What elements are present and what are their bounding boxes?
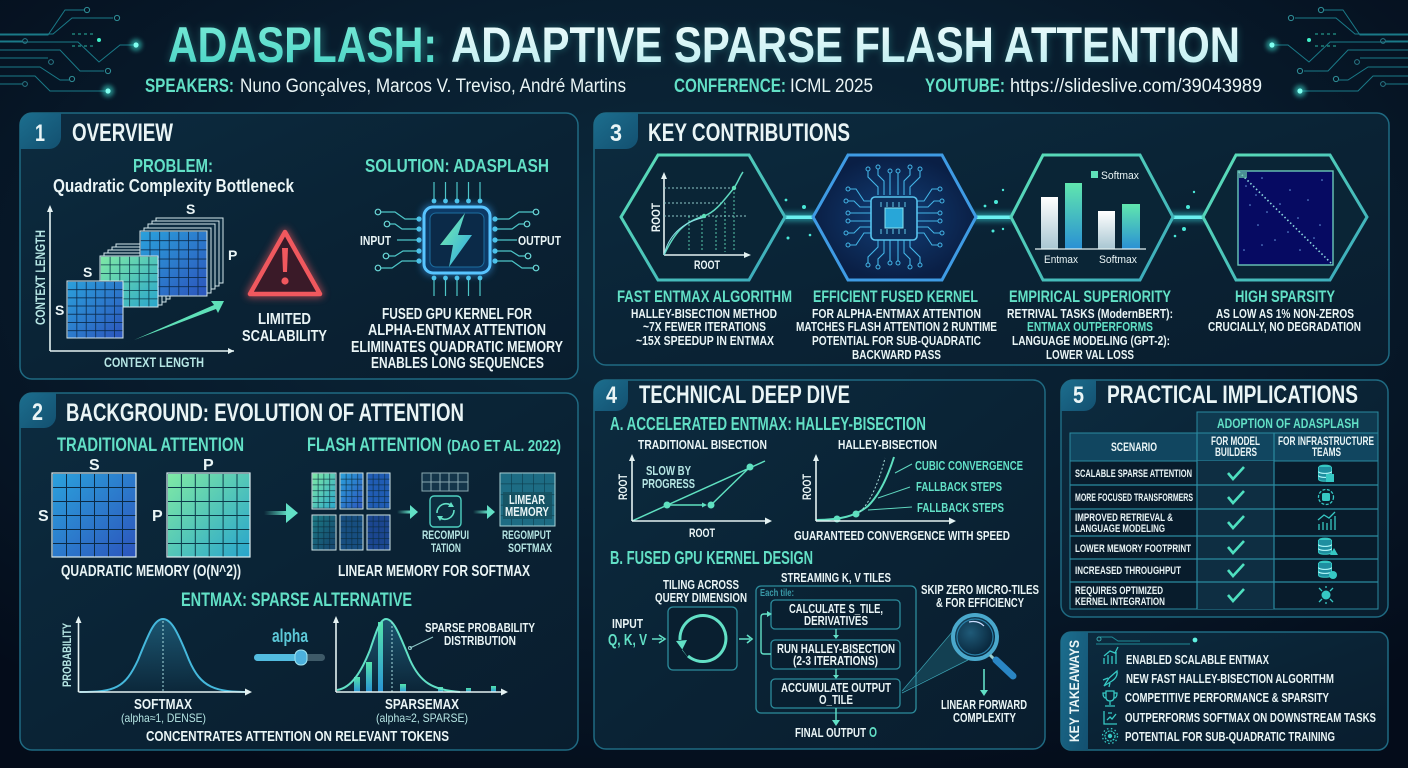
matrices: S by S and P by P: P [152,508,163,525]
final output: O [869,724,877,741]
solution description: ELIMINATES QUADRATIC MEMORY [351,339,563,356]
solution description: ENABLES LONG SEQUENCES [371,355,544,372]
memory captions: QUADRATIC MEMORY (O(N^2)) [61,563,241,580]
row: increased throughput: INCREASED THROUGHPUT [1075,565,1181,577]
contribution: efficient fused kernel [796,287,997,362]
limited scalability label: LIMITED [258,311,311,328]
tiling loop: QUERY DIMENSION [655,590,747,605]
chart: traditional bisection: ROOT [689,526,715,540]
circuit decoration: top right [1266,7,1408,97]
row: more focused transformers: MORE FOCUSED TRANSFORMERS [1075,492,1193,504]
step: calculate: CALCULATE S_TILE, [789,601,883,616]
chart: quadratic complexity matrices: S [186,201,195,217]
recomputation icon: TATION [431,541,461,555]
contribution: empirical superiority: LANGUAGE MODELING (GPT-2): [1012,333,1170,348]
recomputation icon: RECOMPUI [422,528,469,542]
hexagon: high sparsity heatmap [1203,155,1367,280]
row: scalable sparse attention [1075,465,1334,482]
step: calculate: DERIVATIVES [804,613,868,628]
problem heading: PROBLEM: [133,156,213,176]
row: lower memory footprint [1075,538,1338,555]
chart: softmax distribution: (alpha≈1, DENSE) [121,711,206,725]
contribution: fast entmax algorithm [617,287,792,348]
concentrates caption: CONCENTRATES ATTENTION ON RELEVANT TOKENS [146,728,449,745]
problem heading: Quadratic Complexity Bottleneck [53,176,295,196]
arrow to linear memory [473,505,495,519]
speakers / conference / youtube line: YOUTUBE: [925,76,1005,97]
row: more focused transformers [1075,490,1334,504]
icon: AdaSplash GPU chip [375,182,539,296]
chart: traditional bisection: PROGRESS [642,476,695,491]
contribution: efficient fused kernel: POTENTIAL FOR SUB-QUADRATIC [812,333,981,348]
contribution: fast entmax algorithm: ~7X FEWER ITERATIONS [643,319,766,334]
hexagon: empirical superiority bar chart: Entmax [1044,254,1078,266]
takeaway: potential for sub-quadratic training [1102,728,1335,744]
row: improved retrieval [1075,512,1335,535]
hexagon: empirical superiority bar chart: Softmax [1099,254,1137,266]
contribution: efficient fused kernel: BACKWARD PASS [852,347,941,362]
contribution: empirical superiority: LOWER VAL LOSS [1046,347,1134,362]
chart: traditional bisection [616,437,772,540]
section B heading: B. FUSED GPU KERNEL DESIGN [610,548,813,568]
vertical key takeaways label: KEY TAKEAWAYS [1066,640,1082,742]
chart: quadratic complexity matrices: CONTEXT LENGTH [104,354,204,370]
panel 1 heading: OVERVIEW [72,119,173,147]
traditional attention heading: TRADITIONAL ATTENTION [57,435,244,456]
memory captions: LINEAR MEMORY FOR SOFTMAX [338,563,530,580]
speakers / conference / youtube line [145,76,1262,97]
solution description: ALPHA-ENTMAX ATTENTION [368,322,546,339]
glowing connectors between hexagons [778,189,1209,240]
skip zero micro-tiles magnifier: SKIP ZERO MICRO-TILES [921,582,1039,597]
title: ADASPLASH: [168,17,437,73]
row: requires optimized kernel integration: REQUIRES OPTIMIZED [1075,585,1163,597]
speakers / conference / youtube line: https://slideslive.com/39043989 [1010,76,1262,97]
speakers / conference / youtube line: SPEAKERS: [145,76,234,97]
title: ADAPTIVE SPARSE FLASH ATTENTION [451,17,1240,73]
panel 3 number: 3 [610,120,622,147]
contribution: empirical superiority: EMPIRICAL SUPERIORITY [1009,287,1172,306]
matrices: S by S and P by P: S [38,508,49,525]
streaming tile pipeline: STREAMING K, V TILES [781,570,891,585]
skip zero micro-tiles magnifier [901,582,1039,693]
linear memory box [500,473,555,555]
panel 4: technical deep dive [594,380,1045,749]
skip zero micro-tiles magnifier: & FOR EFFICIENCY [936,595,1024,610]
hexagon: empirical superiority bar chart [1011,155,1173,280]
linear memory box: LIMEAR [509,492,545,507]
solution description [351,306,563,372]
adoption table: TEAMS [1312,445,1341,459]
panel 1 number: 1 [35,120,45,147]
panel 4 heading: TECHNICAL DEEP DIVE [639,381,850,409]
input Q K V: Q, K, V [608,632,647,649]
flash attention heading: (DAO ET AL. 2022) [447,438,561,455]
hexagon: empirical superiority bar chart: Softmax [1101,170,1139,182]
takeaway: competitive performance: COMPETITIVE PERFORMANCE & SPARSITY [1125,690,1329,705]
chip input and output labels: OUTPUT [518,233,561,248]
panel 3: key contributions [594,113,1389,365]
final output: FINAL OUTPUT [795,725,866,740]
panel 2 number: 2 [32,399,43,426]
takeaway: enabled scalable entmax: ENABLED SCALABLE ENTMAX [1126,652,1269,667]
guaranteed convergence caption: GUARANTEED CONVERGENCE WITH SPEED [794,528,1010,543]
takeaway: new fast halley-bisection: NEW FAST HALLEY-BISECTION ALGORITHM [1126,671,1334,686]
contribution: efficient fused kernel: FOR ALPHA-ENTMAX ATTENTION [812,306,981,321]
linear memory box: SOFTMAX [508,541,552,555]
entmax heading: ENTMAX: SPARSE ALTERNATIVE [181,590,412,611]
linear forward complexity [941,669,1027,725]
step: halley-bisection: RUN HALLEY-BISECTION [777,641,895,656]
chart: sparsemax distribution: SPARSE PROBABILITY [425,620,535,635]
linear forward complexity: LINEAR FORWARD [941,697,1027,712]
section A heading: A. ACCELERATED ENTMAX: HALLEY-BISECTION [610,414,926,434]
step: accumulate: O_TILE [819,692,853,707]
chart: sparsemax distribution: SPARSEMAX [385,696,459,713]
contribution: high sparsity [1208,287,1361,334]
contribution: high sparsity: HIGH SPARSITY [1235,287,1335,306]
contribution: fast entmax algorithm: HALLEY-BISECTION METHOD [631,306,777,321]
speakers / conference / youtube line: Nuno Gonçalves, Marcos V. Treviso, André Martins [240,76,626,97]
linear forward complexity: COMPLEXITY [953,710,1016,725]
adoption table: SCENARIO [1111,440,1157,454]
contribution: empirical superiority [1007,287,1173,362]
solution heading: SOLUTION: ADASPLASH [365,156,549,176]
small circuit decoration [1096,637,1197,644]
row: requires optimized kernel integration [1075,585,1333,608]
adoption table: BUILDERS [1215,445,1257,459]
adoption table: ADOPTION OF ADASPLASH [1217,415,1359,431]
chip input and output labels [360,233,561,248]
row: increased throughput [1075,561,1337,579]
chip input and output labels: INPUT [360,233,391,248]
chart: quadratic complexity matrices: P [228,247,237,263]
limited scalability label [242,311,327,345]
linear memory box: MEMORY [505,504,549,519]
panel 4 number: 4 [606,382,618,409]
speakers / conference / youtube line: ICML 2025 [790,76,873,97]
memory captions [61,563,530,580]
step: accumulate [771,679,900,708]
hexagon: fast entmax chart: ROOT [694,258,720,272]
tiling loop [655,577,752,670]
contribution: efficient fused kernel: MATCHES FLASH ATTENTION 2 RUNTIME [796,319,997,334]
input Q K V [608,616,665,649]
tiling loop: TILING ACROSS [663,577,739,592]
hexagon: fast entmax chart: ROOT [649,202,663,232]
panel 1: overview [20,113,578,379]
arrow to recomputation [397,505,418,519]
matrices: S by S and P by P: S [89,457,100,474]
problem heading [53,156,295,196]
streaming tile pipeline: Each tile: [760,588,794,599]
contribution: efficient fused kernel: EFFICIENT FUSED KERNEL [813,287,978,306]
chart: traditional bisection: SLOW BY [646,463,691,478]
speakers / conference / youtube line: CONFERENCE: [674,76,786,97]
circuit decoration: top left [0,7,142,97]
adoption table: FOR MODEL [1211,434,1260,448]
chart: softmax distribution: SOFTMAX [134,696,192,713]
streaming tile pipeline [756,570,916,726]
chart: sparsemax distribution: (alpha≈2, SPARSE) [376,711,468,725]
step: accumulate: ACCUMULATE OUTPUT [781,680,891,695]
recomputation icon [422,473,469,555]
row: improved retrieval: IMPROVED RETRIEVAL & [1075,512,1173,524]
chart: traditional bisection: TRADITIONAL BISECTION [638,437,767,452]
icon: warning triangle [250,232,320,294]
arrow to flash attention [264,503,298,523]
row: lower memory footprint: LOWER MEMORY FOOTPRINT [1075,543,1191,555]
chart: quadratic complexity matrices: S [55,302,64,318]
contribution: empirical superiority: ENTMAX OUTPERFORMS [1027,319,1153,334]
panel: key takeaways [1061,632,1388,750]
flash attention heading: FLASH ATTENTION [307,435,442,456]
limited scalability label: SCALABILITY [242,328,327,345]
panel 3 heading: KEY CONTRIBUTIONS [648,119,850,147]
matrices: S by S and P by P: P [203,457,214,474]
panel 2 heading: BACKGROUND: EVOLUTION OF ATTENTION [66,399,464,427]
chart: traditional bisection: ROOT [616,474,630,500]
matrices: S by S and P by P [38,457,250,557]
step: halley-bisection: (2-3 ITERATIONS) [793,653,878,668]
contribution: high sparsity: CRUCIALLY, NO DEGRADATION [1208,319,1361,334]
chart: halley-bisection [800,437,1023,524]
panel 5 number: 5 [1073,382,1084,409]
chart: halley-bisection: CUBIC CONVERGENCE [915,458,1023,473]
solution description: FUSED GPU KERNEL FOR [382,306,532,323]
chart: halley-bisection: FALLBACK STEPS [916,479,1002,494]
panel 2: background [20,393,578,750]
chart: quadratic complexity matrices: CONTEXT LENGTH [32,230,48,325]
row: requires optimized kernel integration: KERNEL INTEGRATION [1075,596,1165,608]
chart: softmax distribution [60,616,252,725]
chart: softmax distribution: PROBABILITY [60,623,74,687]
alpha slider: alpha [272,626,309,646]
chart: sparsemax distribution [333,616,535,725]
chart: quadratic complexity matrices: S [83,264,92,280]
takeaway: new fast halley-bisection [1103,671,1334,687]
chart: quadratic complexity matrices [32,201,237,370]
alpha slider [254,626,325,665]
row: scalable sparse attention: SCALABLE SPARSE ATTENTION [1075,468,1192,480]
step: calculate [771,600,900,629]
chart: halley-bisection: FALLBACK STEPS [917,500,1004,515]
contribution: empirical superiority: RETRIVAL TASKS (ModernBERT): [1007,306,1173,321]
flash attention tiles [312,473,390,550]
chart: sparsemax distribution: DISTRIBUTION [444,633,516,648]
adoption table [1070,412,1378,609]
hexagon: fast entmax chart [621,155,785,280]
panel 5: practical implications [1061,380,1388,617]
chart: halley-bisection: HALLEY-BISECTION [838,437,937,452]
takeaway: competitive performance [1103,690,1329,706]
input Q K V: INPUT [612,616,643,631]
chart: halley-bisection: ROOT [800,474,814,500]
takeaway: potential for sub-quadratic training: POTENTIAL FOR SUB-QUADRATIC TRAINING [1125,729,1335,744]
contribution: fast entmax algorithm: FAST ENTMAX ALGORITHM [617,287,792,306]
linear memory box: REGOMPUT [502,528,551,542]
contribution: high sparsity: AS LOW AS 1% NON-ZEROS [1216,306,1354,321]
step: halley-bisection [771,640,900,669]
hexagon: efficient fused kernel chip [813,155,976,280]
contribution: fast entmax algorithm: ~15X SPEEDUP IN ENTMAX [636,333,774,348]
flash attention heading [307,435,561,456]
takeaway: enabled scalable entmax [1104,647,1269,667]
row: improved retrieval: LANGUAGE MODELING [1075,523,1165,535]
